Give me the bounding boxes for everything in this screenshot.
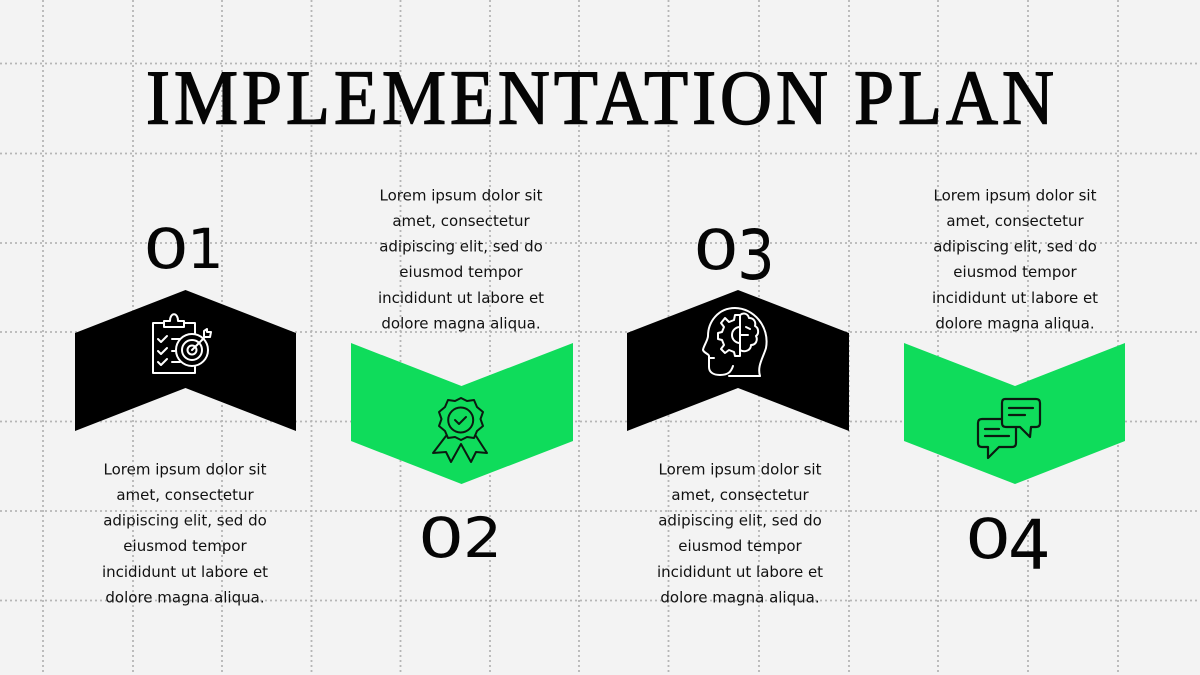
number 01: 1 xyxy=(187,218,224,282)
text: step 3: amet, consectetur xyxy=(671,486,809,504)
number 03 xyxy=(693,216,775,296)
number 04: 4 xyxy=(1008,506,1051,586)
panel: step 1 xyxy=(75,218,296,606)
number 01 xyxy=(143,218,224,282)
text: step 2: Lorem ipsum dolor sit xyxy=(380,186,543,204)
text: step 3: eiusmod tempor xyxy=(678,537,803,555)
number 04 xyxy=(965,506,1051,586)
number 04: 0 xyxy=(965,508,1011,572)
text: step 3: Lorem ipsum dolor sit xyxy=(659,460,822,478)
number 02 xyxy=(418,506,502,571)
text: step 2 xyxy=(378,186,544,332)
text: step 1: amet, consectetur xyxy=(116,486,254,504)
text: step 3: adipiscing elit, sed do xyxy=(658,512,822,530)
text: step 4: dolore magna aliqua. xyxy=(935,314,1095,332)
text: step 2: incididunt ut labore et xyxy=(378,289,544,307)
chevron: step 1 xyxy=(75,290,296,431)
text: step 3: dolore magna aliqua. xyxy=(660,588,820,606)
text: step 3 xyxy=(657,460,823,606)
text: step 1: eiusmod tempor xyxy=(123,537,248,555)
number 02: 0 xyxy=(418,507,464,571)
text: step 2: eiusmod tempor xyxy=(399,263,524,281)
panel: step 3 xyxy=(627,216,849,606)
icon: award ribbon xyxy=(433,398,487,462)
text: step 4: incididunt ut labore et xyxy=(932,289,1098,307)
number 01: 0 xyxy=(143,218,189,282)
text: step 1: adipiscing elit, sed do xyxy=(103,512,267,530)
text: step 1: Lorem ipsum dolor sit xyxy=(104,460,267,478)
chevron: step 4 xyxy=(904,343,1125,484)
text: step 4 xyxy=(932,186,1098,332)
text: step 1: incididunt ut labore et xyxy=(102,563,268,581)
text: step 2: dolore magna aliqua. xyxy=(381,314,541,332)
text: step 4: amet, consectetur xyxy=(946,212,1084,230)
text: step 2: adipiscing elit, sed do xyxy=(379,238,543,256)
chevron: step 2 xyxy=(351,343,573,484)
text: step 2: amet, consectetur xyxy=(392,212,530,230)
text: step 4: Lorem ipsum dolor sit xyxy=(934,186,1097,204)
chevron: step 3 xyxy=(627,290,849,431)
icon: head with brain and gear xyxy=(703,308,767,376)
title: IMPLEMENTATION PLAN xyxy=(146,55,1054,141)
text: step 1: dolore magna aliqua. xyxy=(105,588,265,606)
text: step 4: adipiscing elit, sed do xyxy=(933,238,1097,256)
text: step 3: incididunt ut labore et xyxy=(657,563,823,581)
icon: chat bubbles xyxy=(978,399,1040,458)
number 03: 3 xyxy=(737,216,775,296)
panel: step 2 xyxy=(351,186,573,571)
text: step 4: eiusmod tempor xyxy=(953,263,1078,281)
text: step 1 xyxy=(102,460,268,606)
icon: clipboard and target xyxy=(153,314,211,373)
number 03: 0 xyxy=(693,219,739,283)
number 02: 2 xyxy=(463,506,502,570)
panel: step 4 xyxy=(904,186,1125,586)
